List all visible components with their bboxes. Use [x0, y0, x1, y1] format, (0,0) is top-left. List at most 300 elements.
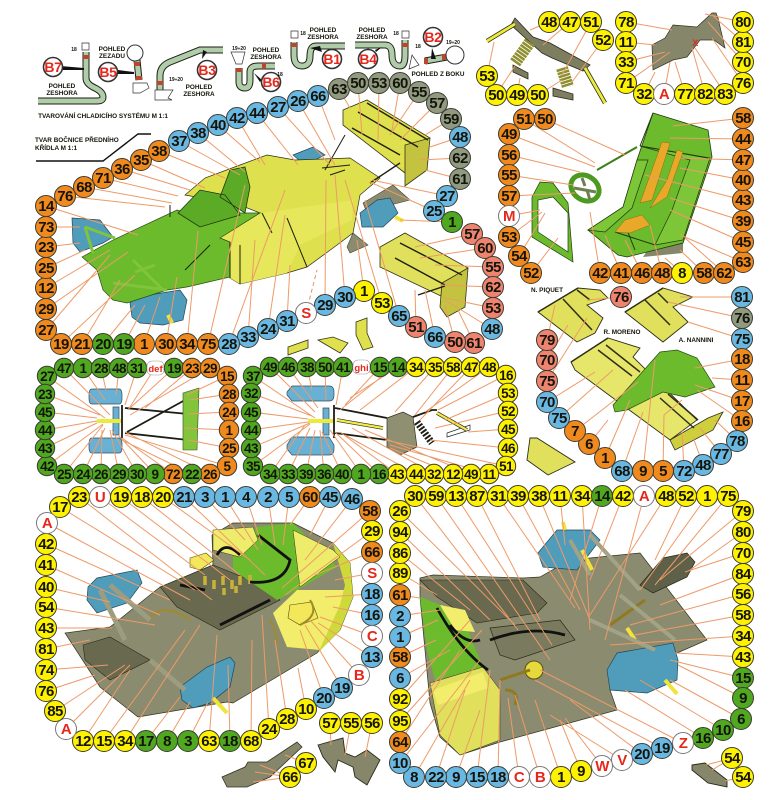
number ring: main car: 62 [452, 150, 468, 167]
number ring: main car: 19 [53, 336, 69, 353]
panel: small bracket part 54 [692, 748, 754, 788]
number ring: main car [36, 72, 504, 354]
steering wheel [566, 170, 604, 206]
part 54 badges: 54 [724, 750, 741, 767]
number ring: front suspension [35, 358, 239, 484]
number ring: engine right: 94 [392, 524, 409, 541]
seat grey base [643, 242, 683, 257]
number ring: main car: 23 [38, 239, 54, 256]
number ring: engine right: 34 [735, 628, 752, 645]
number ring: rear axle: 14 [391, 360, 406, 375]
number ring: seat: 51 [516, 111, 532, 128]
number ring: engine left: 18 [134, 489, 150, 506]
number ring: engine left: 1 [221, 489, 229, 506]
number ring: main car: 33 [240, 329, 256, 346]
number ring: rear axle: ghi [354, 363, 369, 374]
number ring: main car: 38 [151, 143, 167, 160]
hose view labels: ZESHORA [250, 54, 282, 61]
engine frame arms [100, 585, 185, 690]
rear leaders [251, 367, 508, 474]
red mark: X [692, 38, 698, 48]
number ring: engine right: 2 [396, 608, 404, 625]
number ring: engine left: 17 [138, 733, 154, 750]
hose view labels: ZESHORA [46, 90, 78, 97]
panel: engine bay right [390, 486, 754, 788]
number ring: rear axle: 11 [482, 467, 497, 482]
number ring: rear axle: 43 [390, 467, 405, 482]
green nose cone [613, 350, 715, 412]
number ring: front suspension: 29 [112, 467, 126, 482]
hose callout badges: B7 [44, 59, 62, 75]
number ring: front suspension: 9 [152, 467, 159, 482]
front wing [571, 338, 697, 440]
number ring: engine right: 1 [703, 488, 711, 505]
hose view labels: POHLED [186, 84, 213, 91]
small part badges: 57 [322, 715, 338, 732]
number ring: engine right: 9 [739, 690, 747, 707]
number ring: engine left: 13 [364, 649, 380, 666]
number ring: wings: 81 [734, 289, 750, 306]
number ring: engine right: 92 [392, 691, 408, 708]
number ring: suspension: 50 [488, 87, 504, 104]
number ring: engine right: 19 [654, 740, 670, 757]
number ring: rear axle: 47 [464, 360, 478, 375]
number ring: engine right: 86 [392, 545, 408, 562]
car outline details [170, 135, 350, 284]
number ring: engine right: 1 [557, 769, 565, 786]
number ring: engine right: V [617, 752, 627, 769]
number ring: engine right: Z [679, 735, 688, 752]
number ring: rear axle: 51 [499, 459, 514, 474]
number ring: main car: 25 [426, 203, 442, 220]
panel: gray bracket part [616, 12, 754, 104]
number ring: rear axle: 41 [336, 360, 351, 375]
number ring: main car: 53 [374, 295, 390, 312]
hose callout badges [44, 28, 442, 92]
number ring: front suspension: def [148, 364, 163, 375]
panel: engine bay left [36, 486, 382, 752]
number ring: engine left: 17 [52, 499, 68, 516]
number ring: engine left: 4 [242, 489, 251, 506]
caption: cooling system shaping: TVAROVÁNÍ CHLADICÍHO SYSTÉMU M 1:1 [38, 111, 168, 120]
number ring: front suspension: 5 [224, 459, 232, 474]
number ring: engine right: 18 [490, 769, 506, 786]
number ring: engine right: 39 [510, 488, 526, 505]
number ring: wings: 75 [539, 373, 555, 390]
number ring: main car: 65 [391, 308, 407, 325]
number ring: rear axle: 58 [446, 360, 461, 375]
number ring: engine left: 45 [322, 489, 338, 506]
number ring: engine right: 26 [392, 503, 408, 520]
number ring: front suspension: 48 [112, 361, 127, 376]
number ring: rear axle: 34 [409, 360, 424, 375]
suspension leaders [487, 22, 603, 95]
number ring: wings: 76 [734, 310, 750, 327]
number ring: bracket: 76 [735, 75, 751, 92]
number ring: engine left: 8 [163, 733, 171, 750]
hose view labels: POHLED [49, 83, 76, 90]
rear white part [447, 425, 470, 437]
car cowling and sidepod [185, 155, 380, 284]
number ring: engine left: 76 [38, 683, 54, 700]
hose callout badges: B3 [198, 62, 216, 78]
number ring: main car: 14 [38, 198, 55, 215]
car rear suspension and floor [347, 185, 410, 253]
number ring: engine right: 43 [735, 649, 751, 666]
number ring: rear axle: 44 [244, 423, 259, 438]
number ring: engine right: 52 [678, 488, 694, 505]
number ring: engine right: 6 [737, 711, 745, 728]
harness straps [615, 142, 683, 233]
rear wing fitted on car [343, 100, 430, 186]
number ring: main car: 20 [95, 336, 111, 353]
steering rod [597, 147, 637, 170]
number ring: main car: 31 [279, 313, 295, 330]
number ring: rear axle: 44 [409, 467, 424, 482]
number ring: front suspension: 45 [38, 405, 53, 420]
engine wiring [150, 600, 313, 645]
number ring: seat: 57 [501, 188, 517, 205]
number ring: suspension: 52 [595, 32, 611, 49]
number ring: seat [498, 108, 754, 284]
number ring: front suspension: 22 [185, 467, 199, 482]
number ring: main car: 34 [179, 336, 196, 353]
yellow side [430, 667, 500, 755]
number ring: engine right: A [639, 488, 650, 505]
number ring: engine left [36, 486, 382, 752]
dashed guide: S [306, 270, 317, 313]
number ring: seat: 53 [501, 229, 517, 246]
number ring: suspension: 50 [530, 87, 546, 104]
hose callout badges: B4 [359, 51, 377, 67]
panel: front suspension top view [35, 358, 239, 484]
number ring: main car: 29 [317, 297, 333, 314]
right wheel [607, 643, 678, 693]
dark box [640, 553, 695, 593]
number ring: rear axle: 35 [246, 459, 261, 474]
number ring: seat: 56 [501, 147, 517, 164]
right engine wiring [500, 600, 645, 705]
number ring: main car: 29 [38, 301, 54, 318]
number ring: engine right: 22 [428, 769, 444, 786]
number ring: seat: 49 [501, 126, 517, 143]
spare rear wing [380, 233, 468, 317]
number ring: main car: 12 [38, 280, 54, 297]
number ring: wings: 17 [734, 393, 750, 410]
number ring: main car: 27 [270, 99, 286, 116]
number ring: wings: 16 [734, 413, 750, 430]
number ring: engine left: S [367, 565, 377, 582]
number ring: engine right: 61 [392, 587, 408, 604]
driveshaft core [337, 413, 467, 430]
number ring: engine left: 19 [113, 489, 129, 506]
axle [97, 419, 122, 423]
number ring: wings: 70 [539, 352, 555, 369]
number ring: engine left: 10 [298, 701, 314, 718]
number ring: engine left: 43 [38, 620, 54, 637]
number ring: main car: 36 [114, 161, 130, 178]
number ring: engine left: 15 [96, 733, 112, 750]
number ring: main car: 44 [249, 105, 266, 122]
hose view labels: 18 [277, 72, 283, 78]
number ring: engine right: 16 [695, 730, 711, 747]
seat body [588, 113, 712, 257]
number ring: engine right: 87 [469, 488, 485, 505]
number ring: wings: 18 [734, 351, 750, 368]
gearbox [387, 412, 417, 455]
number ring: rear axle: 32 [427, 467, 441, 482]
number ring: main car: 42 [229, 110, 245, 127]
number ring: wings: 7 [571, 423, 579, 440]
number ring: suspension: 48 [541, 14, 557, 31]
driver name labels: N. PIQUET [531, 287, 563, 294]
hose view labels: POHLED [99, 46, 126, 53]
number ring: main car: 73 [38, 219, 54, 236]
car suspension arms [85, 227, 167, 290]
number ring: main car: 48 [484, 321, 500, 338]
small part badges: 55 [343, 715, 359, 732]
number ring: engine left: 20 [316, 690, 332, 707]
number ring: engine right: 79 [735, 503, 751, 520]
number ring: seat: 58 [735, 110, 751, 127]
number ring: engine left: 63 [201, 733, 217, 750]
number ring: rear axle: 50 [318, 360, 332, 375]
number ring: main car: 68 [76, 179, 92, 196]
number ring: engine left: 21 [176, 489, 192, 506]
number ring: engine left: 28 [279, 711, 295, 728]
driver name labels: R. MORENO [604, 329, 640, 336]
caption: front wing side plate [35, 134, 151, 161]
number ring: rear axle: 52 [501, 404, 515, 419]
number ring: rear axle: 45 [501, 422, 516, 437]
car wheels [72, 147, 398, 325]
pale panels [213, 527, 340, 587]
number ring: engine right [390, 486, 754, 788]
suspension bar and plates [511, 18, 590, 100]
hose callout badges: B5 [99, 64, 117, 80]
yellow driveshafts [337, 413, 467, 430]
tyres and hub [287, 386, 334, 455]
driver name labels: A. NANNINI [679, 337, 714, 344]
push rods [122, 400, 188, 440]
number ring: engine left: 34 [117, 733, 134, 750]
yellow radiator block [273, 590, 350, 650]
number ring: main car: 55 [411, 84, 427, 101]
number ring: engine left: A [42, 515, 53, 532]
number ring: rear axle: 53 [501, 386, 516, 401]
number ring: engine right: 75 [720, 488, 736, 505]
black hoses [437, 608, 565, 670]
pale panel [433, 605, 488, 705]
number ring: main car: 1 [448, 214, 456, 231]
seat folds [588, 146, 710, 245]
number ring: engine right: 30 [407, 488, 423, 505]
number ring: main car: 66 [310, 88, 326, 105]
number ring: rear axle: 34 [263, 467, 278, 482]
number ring: front suspension: 44 [38, 423, 53, 438]
number ring: seat: 8 [678, 265, 686, 282]
hose view labels: POHLED [253, 47, 280, 54]
number ring: bracket: 70 [735, 54, 751, 71]
number ring: front suspension: 30 [130, 467, 144, 482]
number ring: rear axle: 37 [246, 369, 260, 384]
driver name labels [531, 287, 714, 344]
number ring: rear axle: 45 [244, 405, 259, 420]
number ring: bracket: 82 [697, 86, 713, 103]
number ring: main car: 57 [464, 226, 480, 243]
number ring: engine left: 81 [38, 641, 54, 658]
number ring: front suspension: 26 [94, 467, 109, 482]
hose callout badges: B6 [262, 74, 280, 90]
yellow rods [487, 24, 605, 103]
car cockpit and headrest [178, 167, 250, 227]
green side [420, 597, 483, 680]
hose view labels: ZESHORA [356, 34, 388, 41]
part 54 leaders [706, 758, 743, 781]
number ring: engine right: 14 [594, 488, 611, 505]
number ring: wings: 78 [729, 433, 745, 450]
number ring: main car: 76 [57, 188, 73, 205]
number ring: seat: 55 [501, 167, 517, 184]
number ring: seat: 52 [523, 265, 539, 282]
number ring: engine left: 3 [201, 489, 209, 506]
number ring: main car: 62 [485, 279, 501, 296]
number ring: main car: 53 [371, 75, 387, 92]
wing grooves and thick edges [538, 288, 698, 428]
number ring: rear axle: 36 [317, 467, 332, 482]
dark hump [420, 580, 547, 623]
hose view labels: 19÷20 [169, 77, 183, 83]
number ring: seat: 63 [735, 254, 751, 271]
number ring: main car: 21 [74, 336, 90, 353]
hose view labels: POHLED [310, 27, 337, 34]
small part badges: 66 [282, 769, 298, 786]
number ring: engine left: C [367, 628, 378, 645]
panel: rear suspension [476, 12, 614, 106]
panel: main car assembly [36, 72, 504, 355]
panel: front wing variants [527, 286, 752, 482]
number ring: wings: 5 [659, 463, 667, 480]
panel: rear axle and gearbox top view [241, 357, 518, 484]
number ring: main car: 30 [337, 289, 353, 306]
number ring: engine left: 42 [38, 536, 54, 553]
number ring: rear axle: 16 [499, 368, 514, 383]
number ring: engine right: 10 [392, 755, 408, 772]
number ring: engine right: C [514, 769, 525, 786]
number ring: rear axle: 16 [372, 467, 387, 482]
number ring: front suspension: 31 [130, 361, 145, 376]
number ring: main car: 35 [133, 152, 149, 169]
part 54 badges [722, 748, 754, 788]
number ring: main car: 28 [221, 336, 237, 353]
number ring: wings: 1 [601, 450, 609, 467]
number ring: engine right: 95 [392, 713, 408, 730]
number ring: rear axle: 49 [263, 360, 277, 375]
number ring: engine right: 11 [553, 488, 568, 505]
number ring: rear axle: 38 [300, 360, 315, 375]
number ring: main car: 75 [200, 336, 216, 353]
number ring: engine left: 20 [155, 489, 171, 506]
number ring: engine left: 2 [264, 489, 272, 506]
number ring: engine left: 41 [38, 557, 54, 574]
number ring: front suspension: 24 [76, 467, 91, 482]
number ring: engine left: 66 [364, 544, 380, 561]
dashboard arch [532, 182, 573, 262]
number ring: front suspension: 1 [80, 361, 88, 376]
number ring: front suspension: 1 [226, 423, 234, 438]
number ring: engine left: U [95, 489, 105, 506]
tyres and hub [89, 389, 122, 453]
number ring: engine right: 1 [396, 629, 404, 646]
number ring: suspension [476, 12, 614, 106]
number ring: seat: 44 [735, 131, 752, 148]
number ring: engine left: 18 [222, 733, 238, 750]
number ring: main car: 60 [477, 240, 493, 257]
number ring: main car: 60 [392, 75, 408, 92]
right engine wheel [180, 657, 235, 708]
number ring: seat: 62 [716, 265, 732, 282]
number ring: main car: 38 [190, 125, 206, 142]
number ring: engine right: 9 [577, 763, 585, 780]
number ring: front suspension: 25 [222, 441, 237, 456]
number ring: wings [536, 286, 752, 482]
number ring: main car: 59 [443, 111, 459, 128]
number ring: wings: 77 [713, 446, 729, 463]
hose view labels: ZESHORA [307, 34, 339, 41]
number ring: engine left: 68 [243, 733, 259, 750]
caption: front wing side plate: TVAR BOČNICE PŘEDNÍHO [35, 135, 119, 144]
number ring: engine left: 40 [38, 579, 54, 596]
number ring: bracket [616, 12, 754, 104]
seat dark creases [615, 113, 708, 250]
number ring: engine right: 89 [392, 565, 408, 582]
engine axle [213, 698, 227, 713]
frame arms [570, 535, 675, 650]
number ring: bracket: A [659, 86, 670, 103]
number ring: engine left: B [354, 667, 365, 684]
number ring: main car: 71 [95, 170, 111, 187]
number ring: engine right: 56 [735, 586, 751, 603]
number ring: bracket: 33 [618, 54, 634, 71]
black hoses [180, 535, 290, 625]
small wing part [527, 438, 575, 475]
number ring: seat: M [503, 208, 515, 225]
number ring: engine right: 31 [490, 488, 506, 505]
number ring: bracket: 77 [677, 86, 693, 103]
number ring: front suspension: 26 [203, 467, 218, 482]
front suspension leaders [45, 368, 229, 474]
number ring: seat: 48 [654, 265, 670, 282]
hose view labels: 18 [71, 47, 77, 53]
wishbones and spring [334, 405, 437, 440]
yellow reservoir [525, 661, 543, 679]
number ring: rear axle: 1 [358, 467, 366, 482]
hose view labels: 19÷20 [446, 40, 460, 46]
number ring: main car: 1 [140, 336, 148, 353]
small part badges: 67 [298, 755, 314, 772]
number ring: wings: 11 [735, 372, 750, 389]
number ring: main car: 37 [171, 133, 187, 150]
number ring: front suspension: 43 [38, 441, 53, 456]
number ring: engine right: 15 [469, 769, 485, 786]
number ring: rear axle: 33 [281, 467, 296, 482]
hose view labels: 18 [300, 31, 306, 37]
number ring: engine left: 19 [334, 680, 350, 697]
number ring: main car: 57 [429, 95, 445, 112]
number ring: wings: 68 [614, 463, 630, 480]
number ring: wings: 48 [695, 457, 711, 474]
number ring: front suspension: 72 [166, 467, 180, 482]
